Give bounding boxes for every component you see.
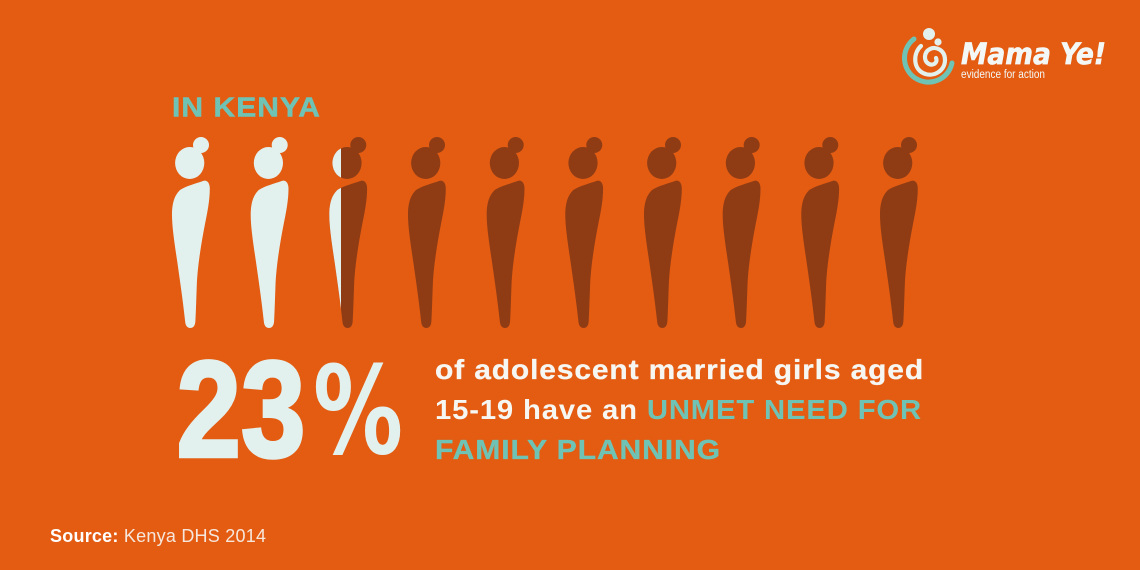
figure 3 partly highlighted — [329, 137, 367, 328]
figure 5 — [487, 137, 524, 328]
big statistic: 23% — [176, 334, 403, 486]
logo: Mama Ye! — [905, 28, 1106, 82]
logo wordmark: Mama Ye! — [961, 37, 1106, 71]
heading: in Kenya: IN KENYA — [172, 92, 321, 122]
figure 6 — [565, 137, 603, 328]
big statistic: 23%: 23 — [176, 334, 306, 486]
statement text: 15-19 have an UNMET NEED FOR — [435, 394, 922, 425]
figure 1 highlighted — [172, 137, 210, 328]
source note: Source: Kenya DHS 2014 — [50, 526, 266, 546]
figure 10 — [880, 137, 918, 328]
statement text: FAMILY PLANNING — [435, 434, 721, 465]
figure 2 highlighted — [251, 137, 288, 328]
logo tagline: evidence for action — [961, 69, 1045, 81]
figure 8 — [723, 137, 760, 328]
statement text — [435, 354, 924, 465]
pictogram: ten women, 23% highlighted — [172, 137, 918, 328]
statement text: of adolescent married girls aged — [435, 354, 924, 385]
figure 4 — [408, 137, 446, 328]
figure 7 — [644, 137, 682, 328]
figure 9 — [801, 137, 839, 328]
icon: mother and child spiral — [905, 28, 952, 82]
big statistic: 23%: % — [313, 340, 403, 482]
